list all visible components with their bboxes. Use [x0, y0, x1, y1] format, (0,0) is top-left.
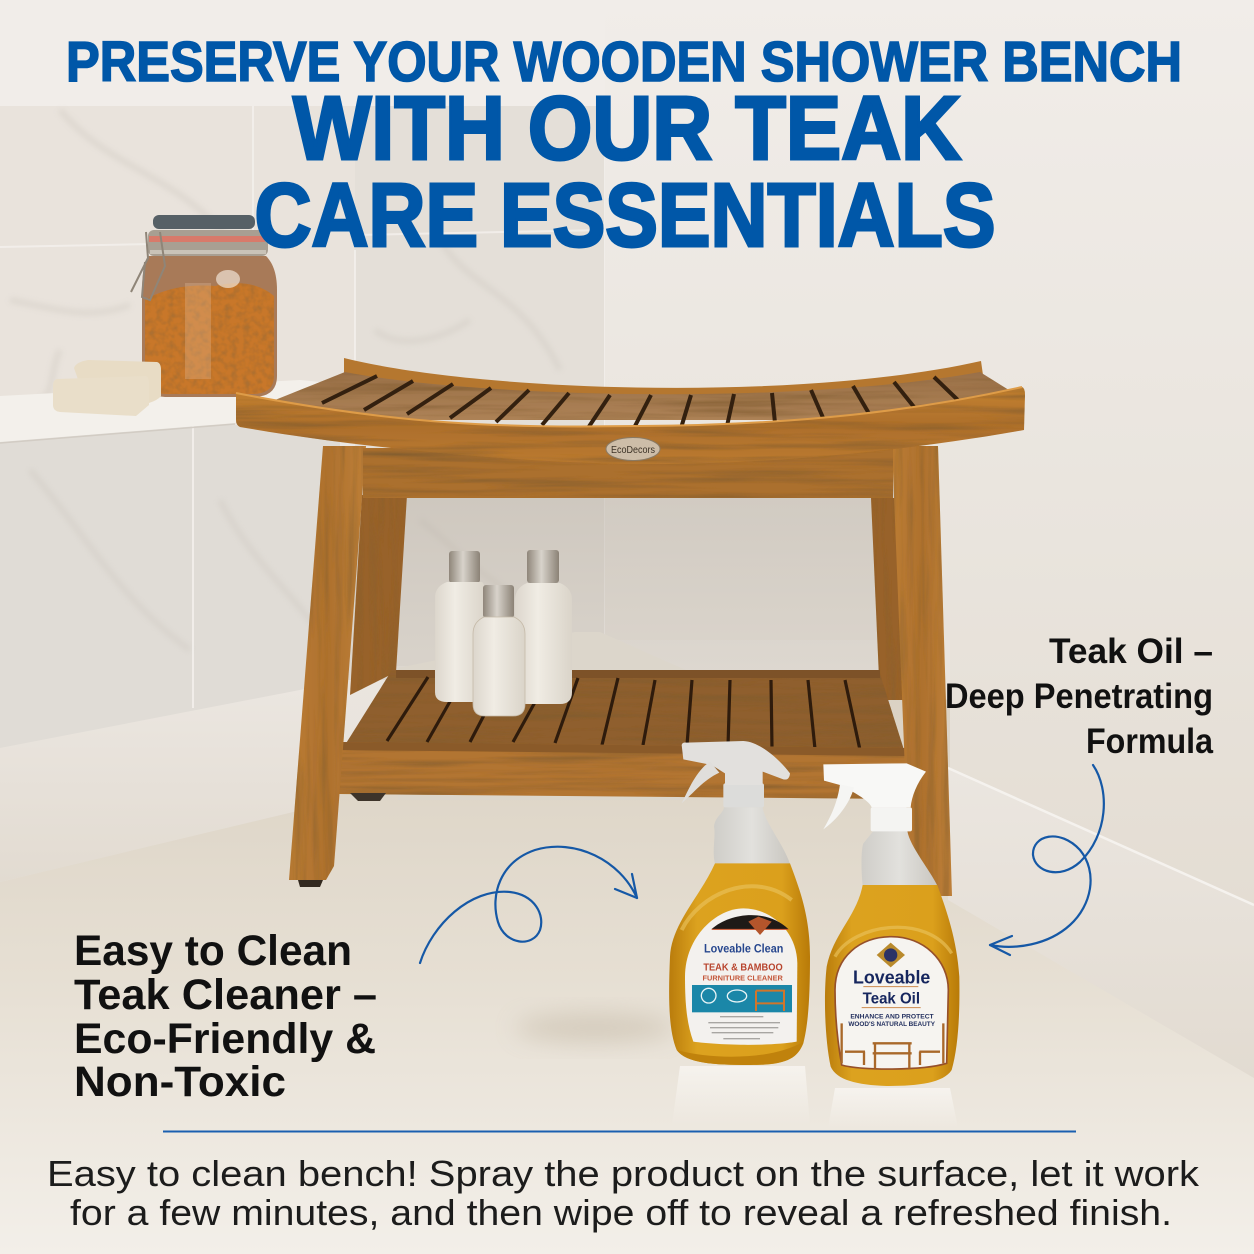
- icon: soap bars: [53, 360, 161, 416]
- sprayer head: [682, 741, 790, 785]
- EcoDecors badge: EcoDecors: [611, 445, 655, 456]
- oil: [825, 885, 959, 1086]
- callout: teak cleaner: Easy to Clean: [74, 927, 352, 975]
- lower front rail: [338, 742, 905, 799]
- neck and glass shoulder: [861, 831, 937, 886]
- ledge with shelf top: [0, 380, 320, 443]
- seat gaps: [322, 376, 963, 428]
- neck and glass shoulder: [714, 807, 790, 864]
- right wall: [605, 0, 1254, 905]
- callout: teak oil: [945, 632, 1213, 761]
- sprayer head: [823, 763, 926, 807]
- reflections of the bottles: [672, 1066, 958, 1128]
- trigger: [682, 762, 719, 803]
- callout: teak cleaner: Eco-Friendly &: [74, 1015, 376, 1063]
- label: Loveable Clean: [704, 942, 783, 956]
- arrow: cleaner callout to cleaner bottle: [420, 847, 637, 963]
- product: Loveable Teak Oil bottle: [823, 763, 959, 1086]
- callout: teak oil: Teak Oil –: [1049, 632, 1213, 671]
- title line 3: CARE ESSENTIALS: [254, 166, 996, 266]
- front left foot: [298, 880, 323, 887]
- floor shadow of products: [515, 1014, 675, 1042]
- lower slatted shelf: [345, 670, 904, 750]
- label: ENHANCE AND PROTECT: [850, 1014, 934, 1021]
- title: [66, 30, 1182, 266]
- seat front panel: [236, 387, 1025, 464]
- label: TEAK & BAMBOO: [703, 963, 783, 974]
- apron under seat: [363, 448, 893, 498]
- cap: [871, 807, 912, 831]
- teak shower bench: [236, 358, 1025, 896]
- arrow: oil callout to oil bottle: [990, 765, 1104, 955]
- floor: [0, 640, 1254, 1254]
- rear foot: [350, 793, 386, 801]
- label: [835, 937, 948, 1069]
- callout: teak oil: Formula: [1086, 722, 1213, 761]
- description text: [47, 1153, 1200, 1233]
- description text: Easy to clean bench! Spray the product on the surface, let it work: [47, 1153, 1200, 1194]
- label: [685, 908, 797, 1045]
- label: WOOD'S NATURAL BEAUTY: [848, 1021, 936, 1028]
- callout: teak cleaner: Non-Toxic: [74, 1058, 286, 1106]
- callout: teak cleaner: Teak Cleaner –: [74, 971, 377, 1019]
- seat back edge: [344, 358, 984, 403]
- icon: glass jar of bath salts: [131, 215, 277, 397]
- baseboard back corner: [398, 632, 690, 800]
- baseboard left: [0, 688, 310, 882]
- icon: bottle left: [435, 551, 485, 702]
- label: Loveable: [853, 966, 930, 987]
- front left leg: [289, 446, 366, 880]
- label: Teak Oil: [863, 990, 920, 1007]
- callout: teak cleaner: [74, 927, 377, 1106]
- toiletry bottles on shelf: [435, 550, 572, 716]
- marble tiles on left and back wall: [0, 106, 605, 750]
- front right leg: [892, 446, 952, 896]
- label: FURNITURE CLEANER: [702, 974, 784, 983]
- cap: [723, 783, 764, 807]
- oil: [669, 863, 810, 1065]
- callout: teak oil: Deep Penetrating: [945, 677, 1213, 716]
- EcoDecors badge: [606, 438, 660, 460]
- seat slats: [270, 372, 1012, 420]
- title line 2: WITH OUR TEAK: [293, 79, 961, 179]
- product: Loveable Clean teak cleaner bottle: [669, 741, 810, 1065]
- trigger: [823, 784, 854, 829]
- bench rear legs: [350, 495, 906, 700]
- shade behind bench: [340, 465, 910, 680]
- icon: bottle right: [515, 550, 572, 704]
- baseboard right: [948, 768, 1254, 1078]
- description text: for a few minutes, and then wipe off to reveal a refreshed finish.: [70, 1192, 1172, 1233]
- icon: bottle front: [473, 585, 525, 716]
